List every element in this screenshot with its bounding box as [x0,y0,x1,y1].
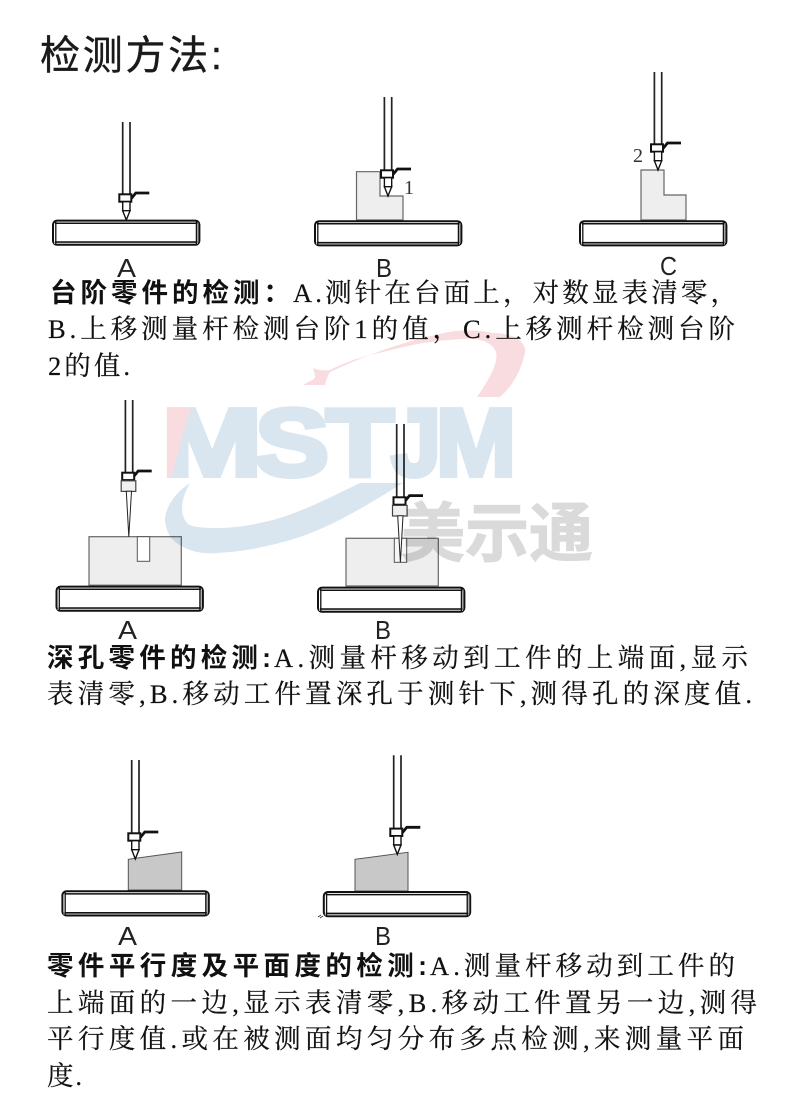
diagram: flatness A [62,760,209,916]
panel: step part diagrams [53,72,726,283]
diagram: flatness B [318,755,470,918]
text block: deep hole inspection [47,643,752,709]
diagram: step C, probe on step 2 [580,72,726,245]
diagram: step B, probe on step 1 [315,97,461,245]
diagram: step C, probe on step 2: 2 [633,145,643,167]
label: B: B [376,253,392,283]
text block: step part inspection: A.测针在台面上，对数显表清零， [293,278,737,308]
label: B: B [375,615,391,645]
text block: parallelism and flatness inspection: A.测量杆移动到工件的 [430,951,735,981]
wordmark: T [326,390,394,496]
text block: parallelism and flatness inspection: 度. [47,1061,82,1091]
panel: parallelism and flatness diagrams [62,755,470,951]
wordmark: S [255,390,329,496]
wordmark [162,390,516,496]
diagram: deep hole A [56,400,203,611]
watermark: MSTJM logo [162,330,593,570]
text block: deep hole inspection: 表清零,B.移动工件置深孔于测针下,测得孔的深度值. [47,679,752,709]
blue swoosh [165,483,403,553]
title: 检测方法: [40,34,222,78]
text block: deep hole inspection: A.测量杆移动到工件的上端面,显示 [274,643,748,673]
wordmark: M [436,390,516,496]
text block: parallelism and flatness inspection [47,951,757,1091]
label: B: B [375,921,391,951]
panel: deep hole diagrams [56,400,464,645]
diagram: step B, probe on step 1: 1 [404,177,414,199]
text block: step part inspection: 2的值. [48,351,130,381]
heading: deep hole parts: 深孔零件的检测: [47,643,271,673]
text block: parallelism and flatness inspection: 上端面的一边,显示表清零,B.移动工件置另一边,测得 [47,988,757,1018]
text block: parallelism and flatness inspection: 平行度值.或在被测面均匀分布多点检测,来测量平面 [47,1024,744,1054]
label: A: A [117,253,137,283]
pink swoosh [303,330,525,397]
label: A: A [118,615,138,645]
wordmark: J [391,390,441,496]
text block: step part inspection [48,278,737,381]
wordmark: Chinese brand: 美示通 [401,498,593,570]
diagram: deep hole B [318,424,464,612]
diagram: step A, probe on table [53,122,199,245]
label: A: A [118,921,138,951]
label: C: C [660,251,677,281]
heading: step parts: 台阶零件的检测： [50,278,290,308]
text block: step part inspection: B.上移测量杆检测台阶1的值，C.上移测杆检测台阶 [48,314,735,344]
wordmark: M [162,390,262,496]
heading: parallelism and flatness: 零件平行度及平面度的检测: [47,951,427,981]
